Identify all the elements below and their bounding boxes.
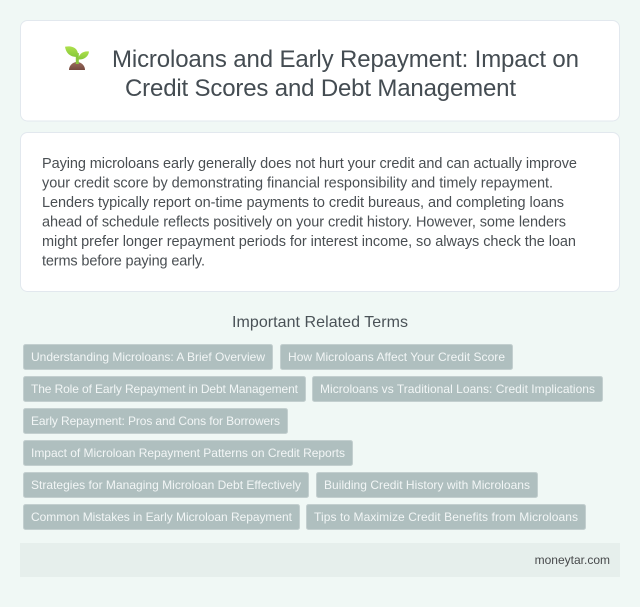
summary text: might prefer longer repayment periods for interest income, so always check the loan — [42, 234, 576, 250]
summary text: Lenders typically report on-time payments to credit bureaus, and completing loans — [42, 195, 564, 211]
chip — [24, 344, 272, 370]
summary text: terms before paying early. — [42, 254, 205, 270]
title text: Microloans and Early Repayment: Impact on — [112, 46, 579, 73]
chip: Impact of Microloan Repayment Patterns on Credit Reports — [31, 446, 345, 460]
chip: Common Mistakes in Early Microloan Repayment — [31, 510, 293, 524]
summary text: your credit score by demonstrating financial responsibility and timely repayment. — [42, 176, 553, 192]
chip — [312, 376, 602, 402]
chip — [316, 472, 538, 498]
chip: Tips to Maximize Credit Benefits from Microloans — [314, 510, 578, 524]
chips: related terms — [24, 344, 602, 530]
chip: Microloans vs Traditional Loans: Credit Implications — [320, 382, 595, 396]
chip — [24, 376, 306, 402]
panel: summary — [20, 132, 620, 292]
footer: moneytar.com — [535, 553, 610, 567]
chip: Building Credit History with Microloans — [324, 478, 530, 492]
title text — [112, 46, 579, 102]
chip: How Microloans Affect Your Credit Score — [288, 350, 505, 364]
footer — [20, 543, 620, 577]
chip: Understanding Microloans: A Brief Overview — [31, 350, 265, 364]
chip: Strategies for Managing Microloan Debt Effectively — [31, 478, 301, 492]
chip — [24, 472, 308, 498]
chip — [24, 408, 288, 434]
chip — [280, 344, 512, 370]
summary text: Paying microloans early generally does not hurt your credit and can actually improve — [42, 156, 577, 172]
chip: Early Repayment: Pros and Cons for Borrowers — [31, 414, 280, 428]
panel: title card — [20, 20, 620, 121]
chip — [306, 504, 586, 530]
chip — [24, 504, 300, 530]
heading: related terms: Important Related Terms — [232, 314, 408, 331]
chip — [24, 440, 352, 466]
summary text — [42, 156, 577, 270]
chip: The Role of Early Repayment in Debt Management — [31, 382, 299, 396]
icon: seedling — [65, 46, 89, 70]
summary text: ahead of schedule reflects positively on your credit history. However, some lenders — [42, 214, 566, 230]
title text: Credit Scores and Debt Management — [125, 75, 516, 102]
